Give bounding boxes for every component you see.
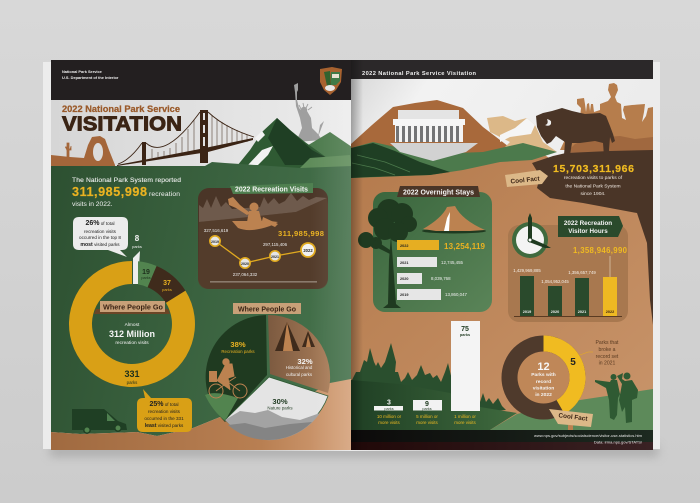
donut chart: record visitation: 12 [537, 361, 550, 373]
sign: cool fact (bottom): Cool Fact [558, 412, 589, 423]
slice: recreation parks 38% [205, 315, 267, 422]
callout: top 8 parks: most visited parks [80, 242, 120, 248]
icon: camper van [72, 409, 127, 433]
illustration: forest [351, 343, 506, 412]
bar chart: parks by visits: parks [384, 407, 394, 411]
bar chart: parks by visits: more visits [378, 420, 400, 425]
donut chart: where people go: parks [127, 380, 138, 385]
bar chart: visitor hours: 1,429,969,885 [513, 268, 541, 273]
left page [51, 60, 352, 450]
icon: cyclist [209, 359, 247, 398]
book shadow [50, 446, 658, 456]
title: 2022 National Park Service [62, 104, 180, 114]
heading: 2022 Recreation Visits [235, 184, 308, 194]
bar chart: overnight stays: 8,039,768 [431, 276, 451, 281]
annotation: parks that broke a record: Parks that [596, 340, 619, 346]
cool fact text: since 1904. [580, 191, 606, 197]
pie chart: where people go [205, 315, 330, 440]
bar chart: visitor hours: 2020 [551, 310, 559, 314]
illustration: dark cliff [532, 150, 653, 325]
illustration: brown hill [351, 100, 513, 170]
bar chart: overnight stays: 12,745,455 [441, 260, 464, 265]
donut chart: record visitation: in 2022 [535, 392, 552, 398]
donut chart: where people go: 37 [163, 280, 171, 287]
sky band [51, 100, 351, 170]
tan ground [51, 379, 351, 450]
callout: least visited parks [137, 389, 192, 432]
bar chart: parks by visits: 75 [461, 326, 469, 333]
donut chart: where people go [69, 234, 195, 387]
line chart: 327,516,619 [204, 228, 229, 233]
icon: tent [422, 206, 486, 234]
bar chart: overnight stays: 13,254,119 [444, 242, 486, 251]
illustration: green ground [351, 380, 653, 430]
line chart: 2021 [271, 255, 279, 259]
callout: least visited parks: recreation visits [148, 409, 181, 414]
bar chart: visitor hours [513, 246, 628, 317]
bar chart: parks by visits: parks [422, 407, 432, 411]
bar chart: visitor hours: 1,356,657,749 [568, 270, 596, 275]
illustration: statue of liberty [294, 83, 324, 142]
sign: where people go (donut) [94, 301, 170, 314]
sign: cool fact (bottom) [549, 409, 593, 432]
donut chart: record visitation: visitation [533, 386, 554, 392]
donut chart: record visitation: record [536, 379, 551, 385]
annotation: parks that broke a record: broke a [598, 347, 616, 353]
donut chart: where people go: 331 [124, 369, 140, 379]
bar chart: visitor hours: 2021 [578, 310, 586, 314]
slice: nature parks 30%: 30% [272, 397, 288, 406]
intro text: visits in 2022. [72, 201, 113, 208]
illustration: tan mountains [487, 116, 557, 152]
intro text: recreation [149, 191, 180, 198]
icon: tree [358, 199, 417, 308]
header bar: 2022 National Park Service Visitation [362, 71, 477, 77]
right page [351, 60, 653, 450]
slice: historical and cultural 32%: Historical and [286, 365, 313, 370]
illustration: delicate arch and cactus [51, 136, 115, 168]
footer bar: www.nps.gov/subjects/socialscience/visitor-use-statistics.htm [534, 433, 643, 438]
sign: where people go (pie) [233, 303, 301, 314]
annotation: parks that broke a record: record set [596, 354, 619, 360]
callout: top 8 parks [73, 217, 128, 257]
bar chart: overnight stays: 2022 [400, 244, 408, 248]
bar chart: overnight stays: 2021 [400, 261, 408, 265]
bar chart: parks by visits: 5 million or [416, 414, 438, 419]
slice: recreation parks 38%: Recreation parks [221, 349, 255, 354]
cool fact text: recreation visits to parks of [564, 175, 623, 181]
donut chart: where people go: parks [132, 244, 142, 249]
callout: top 8 parks: 26% of total [85, 220, 115, 227]
bar chart: overnight stays [397, 240, 486, 300]
donut chart: record visitation: 5 [570, 357, 576, 368]
panel: 2022 recreation visitor hours [508, 213, 628, 322]
tan ground [351, 152, 653, 430]
cool fact text: the National Park System [565, 184, 621, 190]
donut chart: record visitation [502, 335, 586, 420]
donut chart: where people go: 8 [135, 234, 140, 243]
donut chart: where people go: 19 [142, 269, 150, 276]
cool fact text: 15,703,311,966 [553, 163, 634, 175]
icon: clock [512, 213, 551, 258]
sky band [351, 79, 653, 171]
illustration: green mountains [237, 118, 352, 172]
bar chart: overnight stays: 2020 [400, 277, 408, 281]
illustration: lincoln memorial [390, 110, 478, 161]
line chart: 311,985,998 [278, 229, 324, 238]
intro text [72, 177, 181, 208]
forest silhouette [199, 193, 327, 222]
illustration: golden gate bridge [117, 110, 254, 166]
illustration: green hills [351, 142, 557, 178]
slice: nature parks 30%: Nature parks [267, 406, 293, 410]
icon: arrowhead logo [320, 67, 342, 95]
bar chart: overnight stays: 2019 [400, 293, 408, 297]
annotation: parks that broke a record [580, 340, 619, 366]
callout: top 8 parks: occurred in the top 8 [79, 235, 121, 240]
bar chart: parks by visits: 10 million or [377, 414, 402, 419]
sign: where people go (donut): Where People Go [103, 304, 163, 312]
green field [51, 162, 352, 436]
title [62, 104, 182, 136]
line chart: 2019 [211, 240, 219, 244]
line chart [204, 228, 324, 283]
slice: historical and cultural 32%: 32% [297, 357, 313, 366]
bar chart: parks by visits [374, 321, 480, 425]
donut chart: record visitation: Parks with [531, 372, 556, 378]
intro text: 311,985,998 [72, 185, 147, 199]
callout: least visited parks: occurred in the 331 [144, 416, 184, 421]
annotation: parks that broke a record: in 2021 [599, 360, 616, 366]
line chart: 237,064,332 [233, 272, 258, 277]
header bar [51, 60, 351, 100]
donut chart: where people go: recreation visits [115, 340, 149, 346]
icon: kayaker [228, 197, 278, 230]
donut chart: where people go: parks [141, 276, 151, 280]
callout: least visited parks: least visited parks [145, 423, 184, 429]
book page edges [43, 60, 660, 451]
callout: top 8 parks: recreation visits [84, 229, 117, 234]
bar chart: overnight stays: 13,860,047 [445, 292, 468, 297]
bar chart: parks by visits: more visits [454, 420, 476, 425]
slice: historical and cultural 32% [268, 315, 330, 393]
slice: recreation parks 38%: 38% [230, 340, 246, 349]
title: VISITATION [62, 113, 182, 136]
bar chart: visitor hours: 1,054,952,045 [541, 279, 569, 284]
heading: 2022 Recreation [564, 220, 612, 227]
icon: hikers [595, 372, 638, 423]
header bar [351, 60, 653, 79]
donut chart: where people go: Almost [125, 322, 140, 328]
sign: cool fact (top) [505, 170, 548, 187]
donut chart: where people go: 312 Million [109, 329, 155, 339]
heading: 2022 Overnight Stays [403, 190, 474, 196]
line chart: 2020 [241, 262, 249, 266]
slice: historical and cultural 32%: cultural parks [286, 372, 313, 377]
bar chart: parks by visits: 1 million or [454, 414, 476, 419]
bar chart: parks by visits: parks [460, 333, 470, 337]
header bar: National Park Service [62, 69, 103, 74]
bar chart: visitor hours: 2019 [523, 310, 531, 314]
bar chart: parks by visits: more visits [416, 420, 438, 425]
illustration: hoodoos [560, 83, 653, 153]
gutter shadow [351, 60, 363, 450]
bar chart: parks by visits: 3 [387, 400, 391, 406]
panel: 2022 recreation visits [198, 183, 328, 289]
panel: 2022 overnight stays [358, 186, 492, 312]
heading [558, 216, 623, 237]
bar chart: visitor hours: 1,358,946,990 [573, 246, 628, 255]
heading: Visitor Hours [568, 228, 608, 235]
bar chart: visitor hours: 2022 [606, 310, 614, 314]
line chart: 297,115,406 [263, 242, 288, 247]
page highlight [310, 100, 351, 450]
cool fact text [553, 163, 634, 197]
icon: tipis [275, 322, 315, 351]
line chart: 2022 [303, 248, 313, 253]
footer bar [351, 430, 653, 450]
intro text: The National Park System reported [72, 177, 181, 184]
illustration: bison [536, 108, 615, 156]
callout: least visited parks: 25% of total [149, 401, 179, 408]
donut chart: where people go: parks [162, 287, 172, 292]
footer bar: Data: irma.nps.gov/STATS/ [594, 440, 643, 444]
header bar: U.S. Department of the Interior [62, 75, 119, 80]
bar chart: parks by visits: 9 [425, 401, 429, 408]
slice: nature parks 30% [225, 377, 328, 440]
sign: where people go (pie): Where People Go [238, 306, 296, 314]
icon: bison horn [545, 119, 551, 126]
sign: cool fact (top): Cool Fact [510, 175, 541, 186]
